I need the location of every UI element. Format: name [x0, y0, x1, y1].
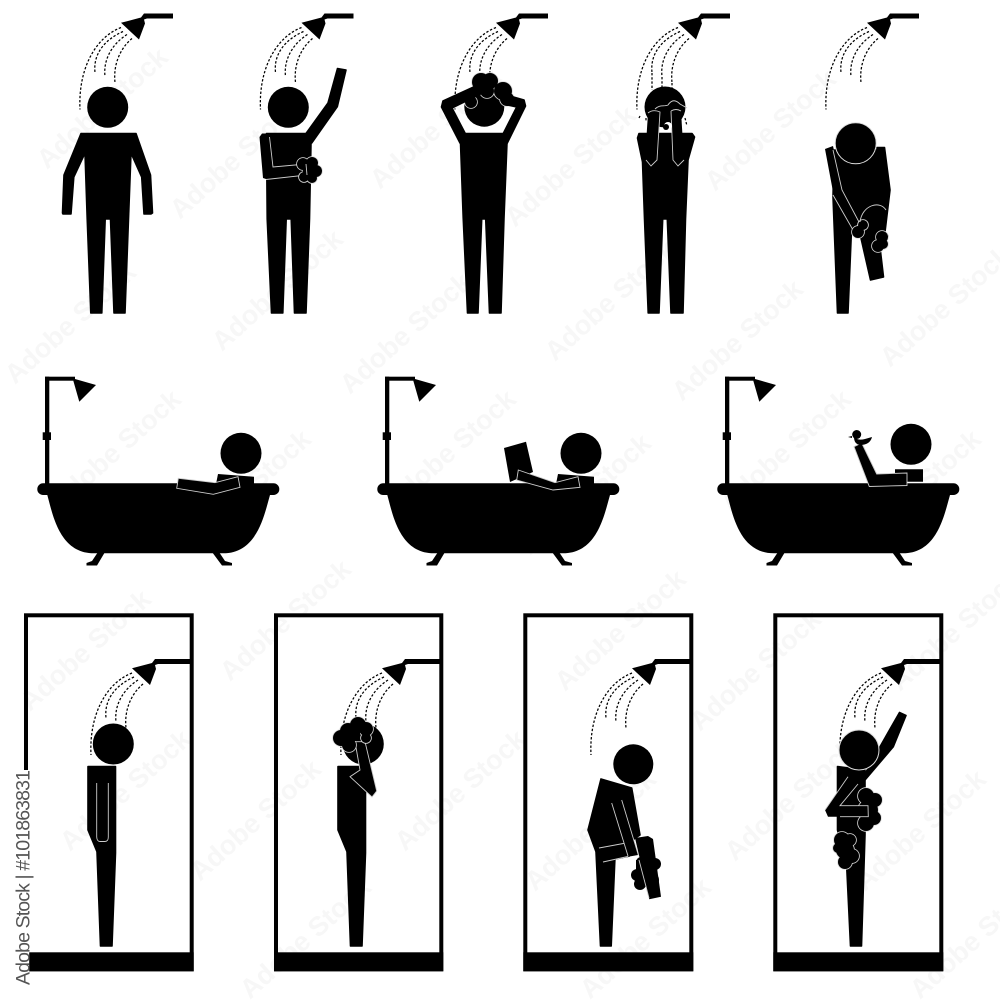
watermark pattern: Adobe Stock — [719, 733, 862, 866]
book — [504, 442, 533, 482]
bathtub: relaxing — [37, 377, 279, 566]
icon: tub with shower — [717, 377, 959, 566]
watermark pattern: Adobe Stock — [0, 256, 142, 389]
torso — [216, 474, 254, 484]
raised leg — [858, 225, 884, 280]
foam — [297, 157, 322, 183]
arm — [350, 742, 377, 797]
arm — [612, 800, 638, 857]
watermark pattern: Adobe Stock — [214, 553, 357, 686]
watermark pattern: Adobe Stock — [714, 383, 857, 516]
watermark pattern: Adobe Stock — [206, 223, 349, 356]
knee outline — [860, 205, 886, 222]
watermark pattern: Adobe Stock — [549, 563, 692, 696]
stock credit strip — [13, 770, 29, 986]
left arm — [442, 85, 482, 143]
left forearm — [645, 112, 660, 166]
head — [343, 724, 384, 764]
bathtub: reading a book — [377, 377, 619, 566]
icon: tub with shower — [37, 377, 279, 566]
soap on face — [664, 122, 672, 130]
body — [638, 134, 694, 313]
foam — [631, 857, 661, 890]
right arm — [503, 96, 526, 143]
stall floor — [523, 952, 693, 971]
stall floor — [773, 952, 943, 971]
head — [890, 424, 932, 465]
stock credit text: Adobe Stock | #101863831 — [12, 770, 34, 985]
extra water streams — [639, 73, 687, 126]
watermark pattern: Adobe Stock — [14, 583, 157, 716]
icon: rubber duck — [848, 430, 872, 445]
right arm — [870, 148, 890, 252]
watermark pattern: Adobe Stock — [519, 763, 662, 896]
head — [839, 730, 879, 770]
watermark pattern: Adobe Stock — [699, 63, 842, 196]
stall frame — [775, 615, 941, 969]
watermark pattern: Adobe Stock — [499, 99, 642, 232]
watermark pattern: Adobe Stock — [184, 753, 327, 886]
head — [464, 87, 504, 127]
head — [93, 724, 134, 764]
body — [460, 134, 507, 313]
shower stall: washing hair in profile — [274, 615, 443, 971]
watermark pattern: Adobe Stock — [174, 423, 317, 556]
watermark pattern: Adobe Stock — [44, 383, 187, 516]
stall frame — [26, 615, 192, 969]
stall floor — [274, 952, 443, 971]
icon: shower head and spray — [260, 14, 354, 110]
bathtub: playing with rubber duck — [717, 377, 959, 566]
icon: shower head and spray — [637, 14, 730, 110]
stall frame — [525, 615, 691, 969]
watermark pattern: Adobe Stock — [31, 41, 174, 174]
thigh — [597, 843, 630, 863]
foam — [852, 220, 888, 252]
washing arm — [260, 134, 307, 179]
head — [613, 744, 653, 784]
icon: shower head and spray — [591, 659, 684, 755]
shower pipe — [160, 659, 190, 664]
watermark pattern: Adobe Stock — [539, 233, 682, 366]
head — [560, 433, 602, 474]
foam on chest — [858, 788, 882, 831]
arm — [177, 477, 240, 494]
watermark pattern: Adobe Stock — [164, 91, 307, 224]
raised arm — [865, 712, 906, 780]
figure: washing face — [637, 14, 730, 313]
foam line on head — [655, 101, 687, 109]
head — [835, 123, 876, 164]
raised arm — [306, 68, 346, 143]
shower stall: washing leg in profile — [523, 615, 693, 971]
watermark pattern: Adobe Stock — [334, 266, 477, 399]
body — [62, 134, 152, 313]
body — [266, 134, 311, 313]
icon: tub with shower — [377, 377, 619, 566]
foam — [333, 717, 373, 752]
figure: washing leg, bent forward — [825, 14, 919, 313]
body — [833, 150, 878, 313]
body — [338, 766, 366, 946]
torso — [556, 474, 594, 484]
head — [644, 86, 686, 128]
stall floor — [24, 952, 194, 971]
icon: shower head and spray — [840, 659, 933, 755]
left arm — [825, 146, 863, 232]
watermark pattern: Adobe Stock — [666, 273, 809, 406]
head — [87, 87, 128, 128]
head — [220, 433, 262, 474]
icon: shower head and spray — [341, 659, 434, 755]
shower stall: standing profile — [24, 615, 194, 971]
watermark pattern: Adobe Stock — [364, 61, 507, 194]
body — [88, 766, 116, 946]
shin — [635, 836, 661, 899]
figure: washing armpit — [260, 14, 354, 313]
watermark pattern: Adobe Stock — [389, 723, 532, 856]
foam on hip — [833, 832, 859, 869]
watermark pattern: Adobe Stock — [849, 763, 992, 896]
shower stall: washing armpit in profile — [773, 615, 943, 971]
body — [838, 766, 865, 946]
watermark pattern: Adobe Stock — [684, 603, 827, 736]
shower pipe — [660, 659, 690, 664]
figure: washing hair — [442, 14, 548, 313]
shower pipe — [410, 659, 440, 664]
foam — [465, 73, 514, 108]
stall frame — [276, 615, 441, 969]
arm — [854, 443, 907, 486]
hand outline — [306, 164, 307, 175]
watermark pattern: Adobe Stock — [844, 423, 987, 556]
icon: shower head and spray — [455, 14, 548, 110]
head — [268, 87, 309, 128]
icon: shower head and spray — [91, 659, 184, 755]
bent arm — [825, 777, 868, 817]
right forearm — [671, 111, 684, 166]
shower pipe — [909, 659, 940, 664]
arm — [517, 470, 580, 490]
torso — [895, 469, 923, 482]
icon: shower head and spray — [826, 14, 919, 110]
body — [588, 779, 640, 946]
arm outline — [97, 783, 108, 842]
watermark pattern: Adobe Stock — [379, 383, 522, 516]
icon: shower head and spray — [80, 14, 173, 110]
watermark pattern: Adobe Stock — [514, 427, 657, 560]
figure: standing under shower, arms down — [62, 14, 173, 313]
watermark pattern: Adobe Stock — [54, 723, 197, 856]
